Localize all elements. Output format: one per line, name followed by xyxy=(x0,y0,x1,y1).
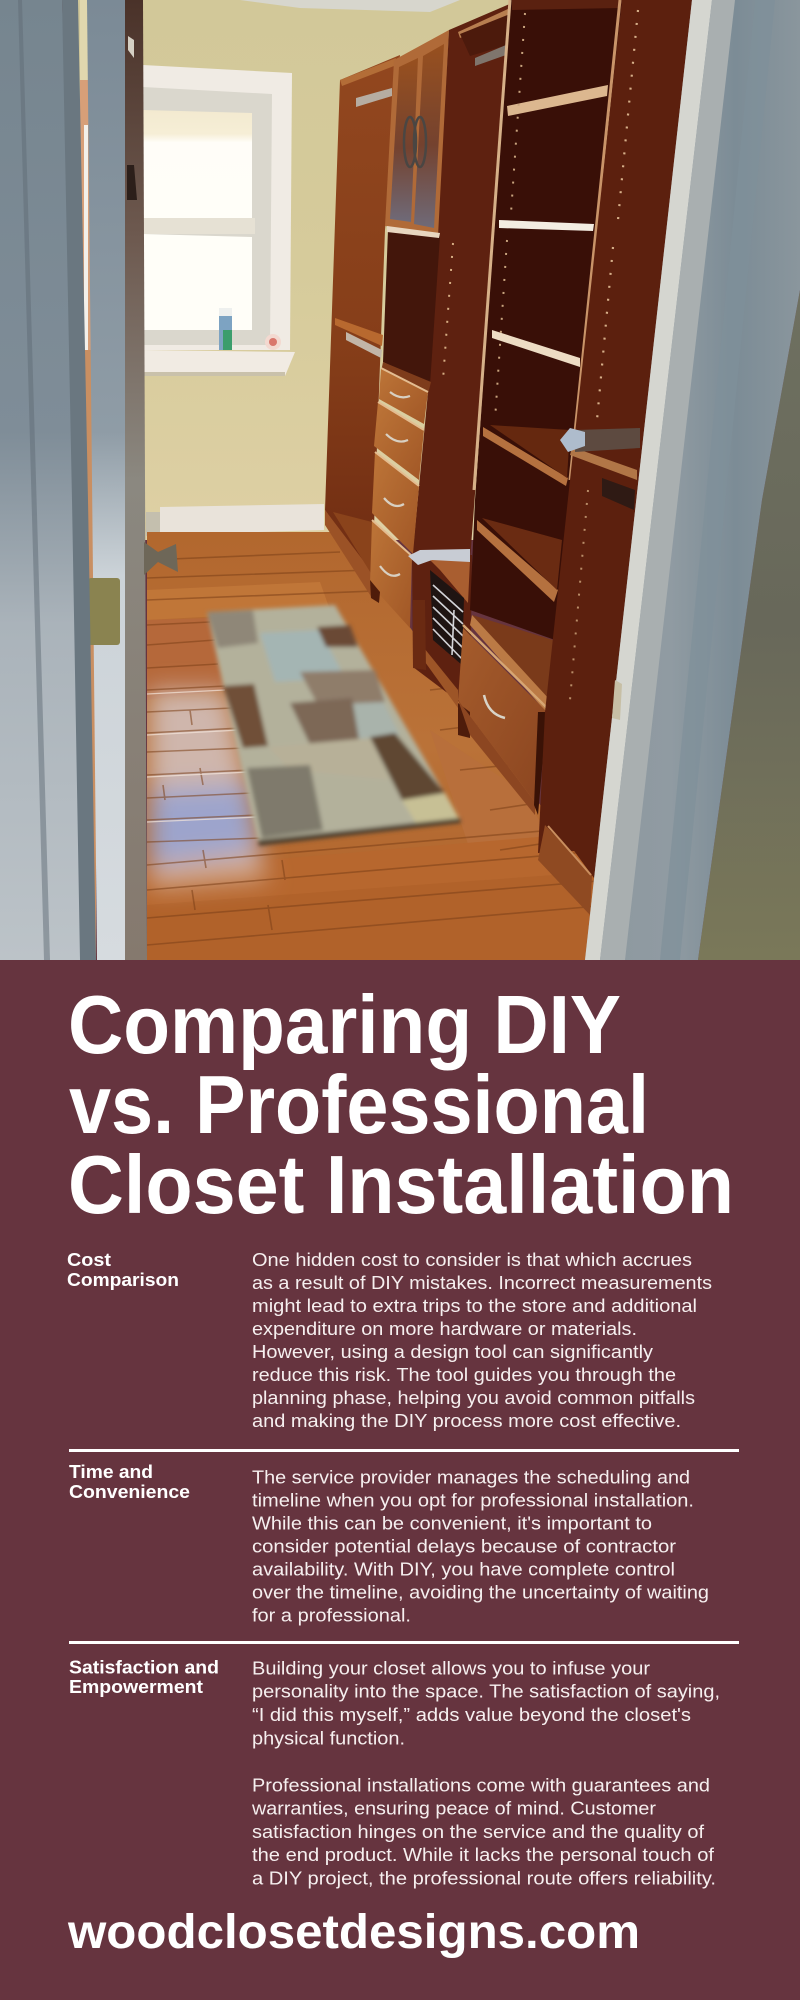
right wall xyxy=(698,290,800,960)
background panel xyxy=(0,960,800,2000)
body: cost comparison: However, using a design tool can significantly xyxy=(252,1341,654,1362)
wire basket shelf xyxy=(408,549,472,710)
body: satisfaction and empowerment: warranties, ensuring peace of mind. Customer xyxy=(251,1798,656,1818)
body: satisfaction and empowerment: satisfaction hinges on the service and the quality of xyxy=(252,1821,705,1842)
drawer stack xyxy=(370,368,428,628)
section: satisfaction and empowerment xyxy=(69,1656,720,1888)
body: time and convenience: for a professional. xyxy=(252,1604,411,1626)
bright side edges xyxy=(474,0,510,490)
title: vs. Professional xyxy=(69,1058,649,1151)
bottle on sill xyxy=(219,308,232,350)
closet back section xyxy=(325,55,400,598)
large bottom drawer xyxy=(458,625,547,815)
title xyxy=(68,978,734,1231)
right closet tower xyxy=(538,0,692,915)
body: satisfaction and empowerment xyxy=(251,1658,720,1888)
body: satisfaction and empowerment: physical function. xyxy=(252,1728,405,1748)
baseboard xyxy=(160,504,324,535)
heading: cost comparison: Cost xyxy=(67,1249,111,1270)
heading: satisfaction and empowerment xyxy=(69,1656,219,1697)
heading: time and convenience: Convenience xyxy=(69,1481,190,1502)
body: cost comparison: might lead to extra trips to the store and additional xyxy=(252,1295,697,1316)
heading: cost comparison xyxy=(67,1249,179,1290)
cabinet doors xyxy=(385,30,449,235)
plank colour variation xyxy=(147,582,330,620)
body: time and convenience: timeline when you opt for professional installation. xyxy=(252,1490,694,1510)
floor vent xyxy=(146,512,160,536)
heading: cost comparison: Comparison xyxy=(67,1269,179,1290)
footer website: woodclosetdesigns.com xyxy=(67,1906,640,1959)
right door frame xyxy=(585,0,800,960)
shelves xyxy=(507,85,608,116)
heading: time and convenience xyxy=(69,1461,190,1502)
body: satisfaction and empowerment: “I did this myself,” adds value beyond the closet's xyxy=(252,1704,691,1725)
left door frame xyxy=(0,0,96,960)
closet base shadow xyxy=(560,500,640,960)
body: cost comparison: reduce this risk. The tool guides you through the xyxy=(252,1364,676,1385)
body: cost comparison xyxy=(252,1249,712,1431)
body: satisfaction and empowerment: Professional installations come with guarantees and xyxy=(252,1774,710,1796)
body: satisfaction and empowerment: a DIY project, the professional route offers reliability. xyxy=(252,1868,716,1888)
heading: satisfaction and empowerment: Satisfaction and xyxy=(69,1656,219,1678)
section: time and convenience xyxy=(69,1461,709,1626)
middle tower xyxy=(381,3,512,560)
room wall xyxy=(76,0,576,960)
body: time and convenience xyxy=(252,1466,709,1626)
title: Comparing DIY xyxy=(68,978,621,1071)
body: cost comparison: expenditure on more hardware or materials. xyxy=(252,1318,637,1339)
body: cost comparison: One hidden cost to consider is that which accrues xyxy=(252,1249,692,1270)
round air freshener xyxy=(265,334,281,350)
body: cost comparison: as a result of DIY mistakes. Incorrect measurements xyxy=(252,1272,712,1293)
section: cost comparison xyxy=(67,1249,712,1431)
shelf holes xyxy=(511,13,525,213)
body: time and convenience: availability. With DIY, you have complete control xyxy=(252,1558,675,1580)
door slab with knob and hinge xyxy=(87,0,178,960)
shelf holes xyxy=(443,243,453,380)
body: satisfaction and empowerment: personality into the space. The satisfaction of saying, xyxy=(252,1680,720,1702)
body: cost comparison: planning phase, helping you avoid common pitfalls xyxy=(252,1387,695,1408)
floor xyxy=(147,530,620,960)
window xyxy=(143,65,295,376)
photo: walk-in closet with wood shelving xyxy=(0,0,800,960)
shelf holes xyxy=(618,10,638,220)
title: Closet Installation xyxy=(68,1138,734,1231)
tall shelving tower xyxy=(470,0,622,712)
body: time and convenience: While this can be convenient, it's important to xyxy=(252,1512,652,1534)
body: time and convenience: consider potential delays because of contractor xyxy=(252,1536,676,1556)
body: cost comparison: and making the DIY process more cost effective. xyxy=(252,1410,681,1431)
open cubby xyxy=(383,230,440,385)
heading: time and convenience: Time and xyxy=(69,1461,153,1482)
heading: satisfaction and empowerment: Empowerment xyxy=(69,1676,203,1697)
body: satisfaction and empowerment: the end product. While it lacks the personal touch of xyxy=(252,1844,715,1865)
rug xyxy=(207,605,461,846)
body: satisfaction and empowerment: Building your closet allows you to infuse your xyxy=(252,1658,650,1678)
body: time and convenience: over the timeline, avoiding the uncertainty of waiting xyxy=(252,1582,709,1602)
body: time and convenience: The service provider manages the scheduling and xyxy=(252,1466,690,1488)
